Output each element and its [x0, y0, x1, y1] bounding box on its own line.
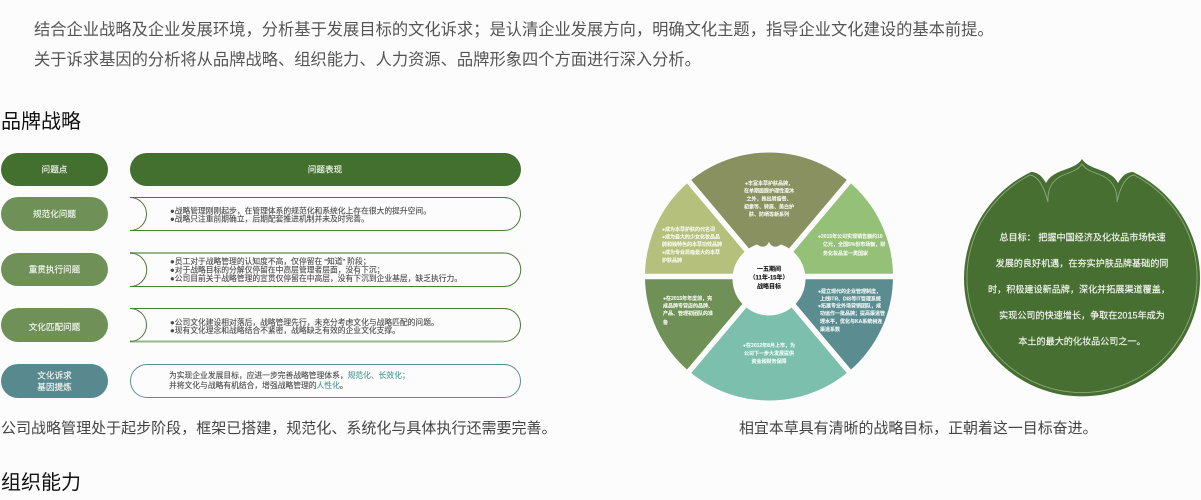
sector text: lower right — [818, 288, 885, 333]
row 2 label: 重贯执行问题 — [29, 264, 81, 274]
sector text: lower left: 产品、管理初团队的准 — [663, 310, 713, 317]
heading: 组织能力: 组织能力 — [1, 471, 81, 494]
sector text: bottom — [743, 342, 795, 365]
sector: top — [689, 152, 849, 276]
sector text: upper left: 护肤品牌 — [662, 257, 682, 264]
sector text: upper left — [662, 226, 722, 264]
row 3 content — [130, 308, 520, 342]
row 2 content: ●员工对于战略管理的认知度不高，仅停留在 “知道” 阶段； — [170, 256, 371, 266]
row 1 content: ●战略只注重前期确立，后期配套推进机制并未及时完善。 — [170, 214, 369, 224]
sector text: upper left: 牌和独特色的本草功效品牌 — [662, 241, 722, 248]
sector text: upper right: 亿元，全国5%份市场额，财 — [823, 241, 885, 248]
sector text: lower right: 理水平，优化与KA系统相连 — [820, 318, 882, 325]
table: problems — [1, 153, 521, 398]
sector text: lower left: 备 — [663, 319, 668, 326]
goal text: 实现公司的快速增长，争取在2015年成为 — [999, 310, 1165, 320]
sector: lower left — [645, 276, 769, 372]
intro text: 结合企业战略及企业发展环境，分析基于发展目标的文化诉求；是认清企业发展方向，明确文化主题，指导企业文化建设的基本前提。 — [34, 20, 994, 39]
header pill: 问题表现 — [130, 153, 521, 186]
pie chart: strategic goals — [640, 152, 898, 401]
sector text: lower right: 渠道系数 — [820, 326, 840, 333]
row 4 label — [1, 364, 108, 398]
row 2 content: ●公司目前关于战略管理的宣贯仅停留在中高层，没有下沉到企业基层，缺乏执行力。 — [170, 273, 462, 283]
sector text: upper left: ●成为本草护肤的代名词 — [662, 226, 715, 233]
goal text: 本土的最大的化妆品公司之一。 — [1018, 336, 1146, 346]
sector text: lower right: ●拓展专业外场营销团队，成 — [818, 302, 881, 310]
sector text: lower right: 上线ITR、DIS等IT管理系统 — [820, 296, 881, 302]
header pill: 问题表现: 问题表现 — [308, 164, 343, 174]
sector text: top: 初素等、转眉、美白护 — [744, 204, 794, 210]
intro text — [34, 20, 994, 69]
sector: lower right — [769, 276, 893, 372]
caption: right: 相宜本草具有清晰的战略目标，正朝着这一目标奋进。 — [739, 420, 1098, 437]
lotus leaf: overall goal — [964, 159, 1200, 396]
header pill: 问题点: 问题点 — [42, 164, 68, 174]
row 2 content — [130, 253, 521, 286]
sector text: lower left — [663, 295, 713, 326]
sector: upper left — [645, 182, 769, 276]
row 4 content — [130, 364, 520, 398]
sector text: lower left: ●在2015年年度前，完 — [663, 295, 712, 302]
sector text: bottom: ●在2012年8月上市，为 — [743, 342, 795, 349]
row 1 label: 规范化问题 — [33, 208, 76, 219]
row 4 content: 并将文化与战略有机结合，增强战略管理的人性化。 — [169, 380, 348, 390]
row 1 label — [1, 197, 108, 231]
center badge — [733, 243, 805, 315]
sector text: top: 之外，推出屑瘤餐、 — [746, 196, 792, 202]
header pill: 问题点 — [1, 153, 108, 186]
sector text: upper left: ●成为最大的少女化妆品品 — [662, 234, 720, 240]
center badge: 一五期间 — [757, 265, 781, 273]
sector text: top — [744, 180, 794, 218]
row 4 label: 基因提炼 — [37, 381, 72, 392]
sector: upper right — [769, 182, 893, 276]
sector text: top: 在单期面膜护理性漫沐 — [744, 188, 794, 194]
sector text: lower right: 功运作一批品牌；提高渠道管 — [820, 310, 885, 317]
sector text: upper right: ●2015年公司实现销售额约10 — [818, 233, 883, 240]
sector text: top: 肤、防晒等新系列 — [749, 211, 789, 218]
row 3 content: ●现有文化理念和战略结合不紧密，战略缺乏有效的企业文化支撑。 — [170, 325, 400, 335]
sector text: lower right: ●建立现代的企业管理制度， — [818, 288, 881, 295]
sector text: bottom: 公司下一步大发展提供 — [744, 350, 794, 357]
row 3 label: 文化匹配问题 — [29, 321, 81, 332]
row 4 content: 为实现企业发展目标，应进一步完善战略管理体系，规范化、长效化； — [169, 370, 410, 380]
sector text: upper right: 务化妆品第一类国家 — [823, 250, 868, 257]
intro text: 关于诉求基因的分析将从品牌战略、组织能力、人力资源、品牌形象四个方面进行深入分析。 — [34, 51, 701, 69]
sector text: top: ●丰富本草护肤品牌， — [745, 180, 793, 187]
row 1 content: ●战略管理刚刚起步，在管理体系的规范化和系统化上存在很大的提升空间。 — [170, 206, 431, 216]
sector text: lower left: 成品牌专营店的品牌、 — [663, 302, 713, 310]
sector text: upper left: ●成为专业屑瘤最大的本草 — [662, 249, 720, 256]
sector text: upper right — [818, 233, 885, 257]
row 3 label — [1, 308, 108, 342]
row 3 content: ●公司文化建设相对落后，战略管理先行，未充分考虑文化与战略匹配的问题。 — [170, 317, 439, 327]
goal text: 发展的良好机遇，在夯实护肤品牌基础的同 — [996, 258, 1168, 268]
row 2 label — [1, 253, 108, 286]
sector text: bottom: 资金和财务保障 — [751, 358, 787, 365]
center badge: 战略目标 — [757, 282, 781, 290]
center badge: （11年-15年） — [749, 274, 789, 282]
row 4 label: 文化诉求 — [37, 370, 72, 380]
goal text — [988, 232, 1170, 346]
heading: 品牌战略: 品牌战略 — [1, 110, 81, 133]
row 1 content — [130, 198, 520, 230]
row 2 content: ●对于战略目标的分解仅停留在中高层管理者层面，没有下沉； — [170, 264, 384, 274]
goal text: 时，积极建设新品牌，深化并拓展渠道覆盖， — [988, 284, 1170, 294]
goal text: 总目标： 把握中国经济及化妆品市场快速 — [999, 232, 1166, 242]
sector: bottom — [689, 276, 849, 401]
caption: left: 公司战略管理处于起步阶段，框架已搭建，规范化、系统化与具体执行还需要完善。 — [1, 420, 557, 437]
